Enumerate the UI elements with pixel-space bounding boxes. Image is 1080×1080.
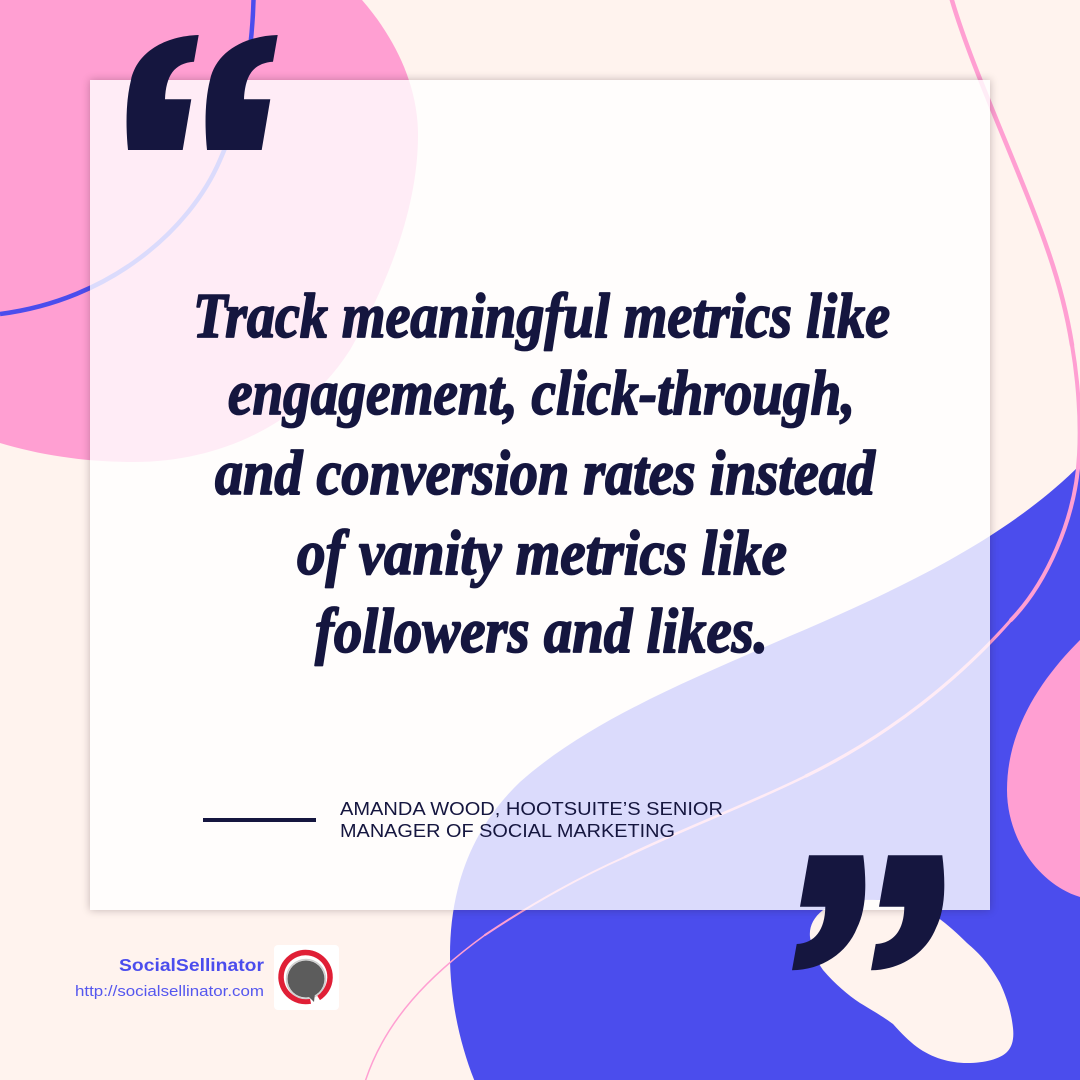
attribution text: MANAGER OF SOCIAL MARKETING [340,820,675,841]
attribution rule [203,818,316,822]
blue blob: bottom right [450,465,1080,1080]
quote text [193,280,890,666]
logo: speech bubble in red ring [274,945,339,1010]
quote text: and conversion rates instead [215,437,876,508]
pink tapered line: right side to bottom [365,0,1080,1080]
quote text: followers and likes. [315,595,768,666]
icon: opening quotation marks [127,35,278,150]
pink blob: top left [0,0,418,462]
brand url: http://socialsellinator.com [75,984,264,1000]
cream blob: inside blue area [810,900,1013,1063]
brand name: SocialSellinator [119,955,264,975]
pink blob: right edge [1007,640,1080,897]
quote text: of vanity metrics like [297,517,787,588]
quote text: engagement, click-through, [228,357,855,428]
blue curved line: top left [0,0,254,314]
attribution text [340,798,723,841]
icon: closing quotation marks [792,855,944,970]
card: translucent white quote panel [90,80,990,910]
attribution text: AMANDA WOOD, HOOTSUITE’S SENIOR [340,798,723,819]
quote text: Track meaningful metrics like [193,280,890,351]
